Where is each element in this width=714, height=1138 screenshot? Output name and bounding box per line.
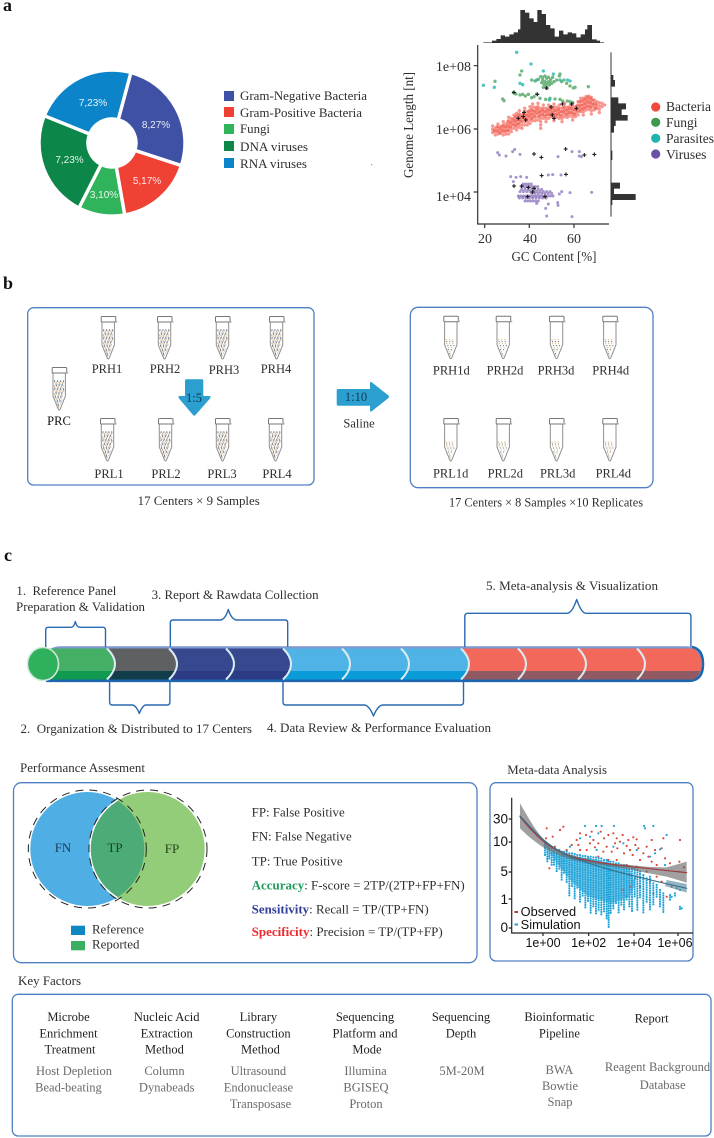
- meta-data y labels: [493, 812, 508, 935]
- donut legend: [224, 89, 372, 171]
- stage 2 segment: [107, 648, 177, 680]
- tube PRL1: [100, 418, 116, 461]
- scatter points: [483, 52, 605, 217]
- meta-data scatter: [520, 803, 687, 928]
- tube labels: PRH3: [209, 363, 239, 377]
- donut value labels: 8,27%: [142, 120, 170, 131]
- column: report: Reagent Background: [605, 1060, 711, 1074]
- venn legend: Reference: [92, 923, 144, 937]
- column: nucleic acid extraction method: Nucleic Acid: [134, 1010, 200, 1024]
- fungi points: [495, 71, 588, 103]
- column: bioinformatic pipeline: Pipeline: [539, 1026, 580, 1040]
- tube PRH3: [216, 316, 232, 359]
- arrow 1:5: [178, 379, 211, 416]
- column: sequencing depth: 5M-20M: [439, 1064, 485, 1078]
- column: nucleic acid extraction method: Extraction: [141, 1026, 193, 1040]
- venn diagram: FN: [55, 840, 72, 855]
- stage 1 label: [16, 584, 146, 614]
- x tick labels: 40: [523, 232, 537, 247]
- diluted tube labels: PRH1d: [433, 363, 470, 377]
- x tick labels: [478, 232, 581, 247]
- stage 5 segments: [461, 648, 702, 680]
- arrow 1:5: 1:5: [186, 391, 202, 405]
- definitions: FP: False Positive: [252, 806, 345, 820]
- column: microbe enrichment treatment: [35, 1010, 113, 1094]
- column: report: [605, 1012, 711, 1092]
- column: sequencing depth: Depth: [446, 1026, 477, 1040]
- diluted tube labels: PRH4d: [592, 363, 630, 377]
- overlap region: [90, 800, 144, 898]
- column: report: Database: [640, 1078, 686, 1092]
- tube PRL3: [216, 418, 232, 461]
- x axis title: GC Content [%]: [512, 250, 596, 265]
- meta-data y labels: 0: [500, 920, 508, 935]
- simulation points: [545, 843, 680, 928]
- donut legend: Gram-Negative Bacteria: [240, 89, 367, 103]
- meta-data legend: Observed: [521, 905, 576, 919]
- column: report: Report: [635, 1012, 669, 1026]
- tube labels: PRC: [47, 414, 71, 428]
- caption: 17 centers x 8 samples x 10 replicates: 17 Centers × 8 Samples ×10 Replicates: [449, 496, 643, 510]
- column: bioinformatic pipeline: Bowtie: [542, 1079, 579, 1093]
- donut value labels: 3,10%: [90, 190, 118, 201]
- stage 3 label: 3. Report & Rawdata Collection: [152, 588, 319, 602]
- x tick labels: 60: [567, 232, 581, 247]
- panel: performance assessment: [14, 783, 477, 963]
- donut value labels: 7,23%: [79, 98, 107, 109]
- definitions: Specificity: Precision = TP/(TP+FP): [252, 925, 443, 939]
- tube PRH2: [158, 316, 174, 359]
- heading: performance assessment: Performance Assesment: [20, 761, 146, 775]
- column: nucleic acid extraction method: Dynabeads: [139, 1080, 195, 1094]
- stage 3 segments: [169, 648, 291, 680]
- panel label b: b: [3, 273, 13, 293]
- meta-data y labels: 10: [493, 834, 508, 849]
- simulation density: [548, 852, 635, 903]
- y axis title: Genome Length [nt]: [402, 72, 417, 178]
- tube labels: PRH1: [92, 362, 122, 376]
- column: microbe enrichment treatment: Host Depletion: [36, 1064, 113, 1078]
- diluted tube labels: PRL2d: [488, 467, 524, 481]
- column: nucleic acid extraction method: Method: [145, 1042, 185, 1056]
- observed trend line: [520, 817, 687, 873]
- tube PRH4: [270, 316, 286, 359]
- black plus markers: [512, 86, 596, 199]
- diluted tube labels: PRL3d: [540, 467, 576, 481]
- donut value labels: 5,17%: [133, 176, 161, 187]
- bracket stage 2: [110, 681, 170, 714]
- y tick labels: 1e+04: [436, 190, 471, 205]
- bracket stage 5: [465, 600, 691, 647]
- axes: [474, 45, 609, 228]
- definitions: [252, 806, 465, 939]
- column: sequencing depth: [432, 1010, 491, 1078]
- panel label c: c: [4, 545, 12, 565]
- tube labels: [47, 362, 292, 481]
- stage 4 segments: [283, 648, 469, 680]
- venn diagram: TP: [107, 840, 123, 855]
- heading: meta-data analysis: Meta-data Analysis: [507, 763, 607, 777]
- stage 1 segment: [43, 648, 115, 680]
- meta-data axes: [509, 798, 693, 936]
- definitions: Sensitivity: Recall = TP/(TP+FN): [252, 902, 429, 916]
- column: sequencing platform and mode: Platform and: [333, 1026, 398, 1040]
- tube PRH1d: [444, 316, 460, 359]
- tube PRL4d: [603, 418, 619, 461]
- stage 4 label: 4. Data Review & Performance Evaluation: [267, 721, 492, 735]
- meta-data x labels: 1e+02: [571, 936, 606, 950]
- donut value labels: [55, 98, 170, 201]
- y tick labels: 1e+06: [436, 123, 471, 138]
- workflow pipeline bar: [28, 646, 703, 681]
- arrow 1:10: [337, 382, 389, 412]
- definitions: TP: True Positive: [252, 855, 343, 869]
- tube labels: PRH2: [150, 362, 180, 376]
- column: library construction method: Construction: [226, 1026, 291, 1040]
- panel: key factors: [12, 994, 711, 1136]
- tube labels: PRL2: [151, 467, 181, 481]
- venn diagram: [28, 790, 207, 908]
- venn legend: [71, 923, 144, 951]
- meta-data legend: [514, 905, 581, 932]
- meta-data x labels: 1e+06: [657, 936, 693, 950]
- observed points: [546, 827, 684, 897]
- column: library construction method: Endonuclease: [224, 1080, 294, 1094]
- column: microbe enrichment treatment: Microbe: [47, 1010, 90, 1024]
- column: sequencing platform and mode: Proton: [349, 1097, 383, 1111]
- virus points: [498, 149, 592, 217]
- slice: Gram-positive bacteria: [116, 150, 181, 215]
- y tick labels: 1e+08: [436, 60, 471, 75]
- donut value labels: 7,23%: [55, 155, 84, 166]
- caption: 17 centers x 9 samples: 17 Centers × 9 Samples: [138, 494, 260, 508]
- reported circle: [91, 792, 205, 906]
- tube PRL2d: [496, 418, 512, 461]
- column: sequencing platform and mode: [333, 1010, 398, 1111]
- stage 1 label: Preparation & Validation: [16, 600, 146, 614]
- tube PRL3d: [550, 418, 566, 461]
- column: library construction method: Transposase: [230, 1097, 292, 1111]
- column: bioinformatic pipeline: Bioinformatic: [524, 1010, 595, 1024]
- meta-data y labels: 1: [500, 892, 508, 907]
- tube labels: PRL4: [262, 467, 292, 481]
- tube PRL1d: [444, 418, 460, 461]
- column: bioinformatic pipeline: BWA: [546, 1063, 573, 1077]
- diluted tube labels: PRL1d: [433, 467, 469, 481]
- diluted tube labels: [433, 363, 632, 481]
- slice: Gram-negative bacteria: [118, 72, 185, 166]
- column: sequencing platform and mode: Sequencing: [336, 1010, 395, 1024]
- tube PRH2d: [496, 316, 512, 359]
- slice: Fungi: [79, 164, 125, 216]
- tube PRL4: [268, 418, 284, 461]
- donut legend: Gram-Positive Bacteria: [240, 106, 362, 120]
- column: microbe enrichment treatment: Treatment: [45, 1042, 96, 1056]
- slice: RNA viruses: [44, 70, 131, 134]
- donut chart: [39, 70, 185, 216]
- diluted tube labels: PRH3d: [538, 363, 575, 377]
- scatter legend: [651, 99, 714, 162]
- meta-data legend: Simulation: [521, 918, 581, 932]
- simulation trend line: [520, 816, 687, 888]
- tube labels: PRL1: [94, 467, 124, 481]
- donut legend: RNA viruses: [240, 157, 307, 171]
- column: sequencing depth: Sequencing: [432, 1010, 491, 1024]
- column: sequencing platform and mode: Mode: [352, 1042, 382, 1056]
- bracket stage 4: [283, 681, 464, 716]
- column: library construction method: [224, 1010, 294, 1111]
- y tick labels: [436, 60, 471, 205]
- column: microbe enrichment treatment: Enrichment: [39, 1026, 98, 1040]
- scatter legend: Viruses: [666, 147, 706, 162]
- column: library construction method: Ultrasound: [231, 1064, 287, 1078]
- column: microbe enrichment treatment: Bead-beating: [35, 1080, 103, 1094]
- panel: stock dilution samples: [28, 308, 314, 485]
- label saline: Saline: [343, 417, 375, 431]
- reference circle: [30, 792, 144, 906]
- bracket stage 3: [170, 610, 288, 647]
- panel: diluted replicates: [410, 307, 653, 488]
- meta-data y labels: 30: [493, 812, 508, 826]
- definitions: FN: False Negative: [252, 830, 352, 844]
- definitions: Accuracy: F-score = 2TP/(2TP+FP+FN): [252, 878, 465, 892]
- stage 2 label: 2. Organization & Distributed to 17 Centers: [20, 722, 252, 736]
- meta-data y labels: 5: [500, 864, 508, 879]
- diluted tube labels: PRL4d: [596, 467, 632, 481]
- column: sequencing platform and mode: Illumina: [344, 1064, 387, 1078]
- tube PRH3d: [550, 316, 566, 359]
- column: library construction method: Method: [241, 1042, 281, 1056]
- arrow 1:10: 1:10: [345, 390, 367, 404]
- donut legend: Fungi: [240, 122, 271, 136]
- tube PRL2: [158, 418, 174, 461]
- stage 5 label: 5. Meta-analysis & Visualization: [486, 579, 659, 593]
- column: library construction method: Library: [240, 1010, 278, 1024]
- parasite points: [483, 52, 570, 100]
- pipeline start cap: [28, 648, 58, 680]
- column: bioinformatic pipeline: Snap: [548, 1095, 572, 1109]
- stage 1 label: 1. Reference Panel: [16, 584, 117, 598]
- scatter legend: Parasites: [666, 131, 714, 146]
- scatter plot: genome length vs GC content: [402, 10, 636, 265]
- donut legend: DNA viruses: [240, 140, 308, 154]
- tube PRH4d: [603, 316, 619, 359]
- heading: key factors: Key Factors: [18, 974, 81, 988]
- venn diagram: FP: [165, 841, 179, 856]
- panel: meta-data analysis: [490, 783, 693, 961]
- tube PRC: [52, 368, 68, 410]
- column: sequencing platform and mode: BGISEQ: [343, 1080, 389, 1094]
- x tick labels: 20: [478, 232, 492, 247]
- column: bioinformatic pipeline: [524, 1010, 595, 1109]
- column: nucleic acid extraction method: Column: [144, 1064, 185, 1078]
- tube PRH1: [101, 316, 117, 359]
- scatter legend: Fungi: [666, 115, 698, 130]
- meta-data x labels: [525, 936, 693, 950]
- confidence ribbons: [520, 803, 687, 883]
- bacteria points: [493, 96, 605, 137]
- top histogram: [483, 10, 604, 43]
- slice: DNA viruses: [39, 116, 101, 208]
- diluted tube labels: PRH2d: [487, 363, 524, 377]
- right histogram: [611, 52, 636, 217]
- meta-data x labels: 1e+00: [525, 936, 561, 950]
- tube labels: PRL3: [207, 467, 237, 481]
- venn legend: Reported: [92, 937, 140, 951]
- column: nucleic acid extraction method: [134, 1010, 200, 1094]
- tube labels: PRH4: [261, 362, 292, 376]
- scatter legend: Bacteria: [666, 99, 711, 114]
- bracket stage 1: [46, 622, 106, 647]
- meta-data x labels: 1e+04: [616, 936, 652, 950]
